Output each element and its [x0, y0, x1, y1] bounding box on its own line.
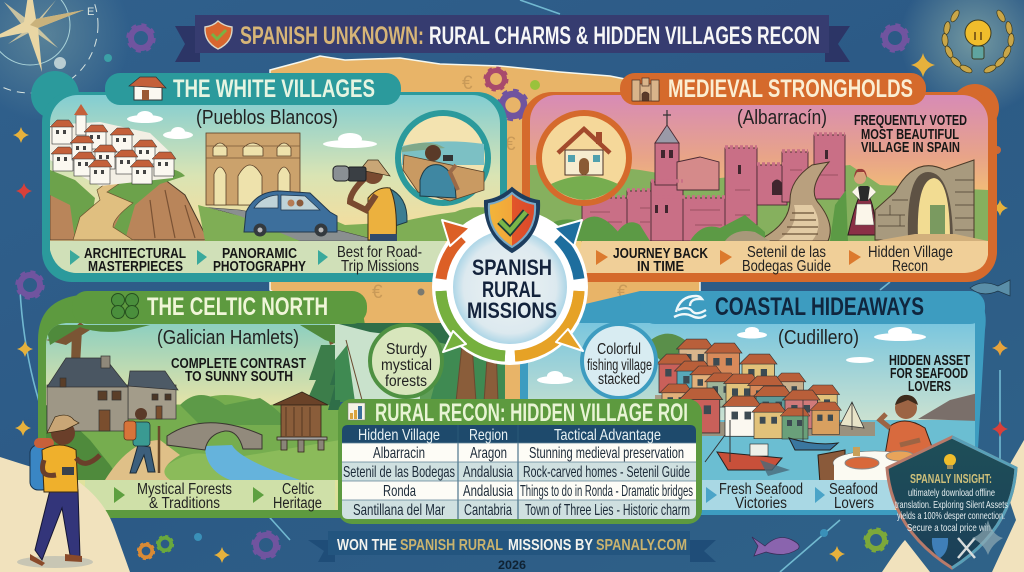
compass rose [0, 0, 98, 93]
callout circle: fishing village: stacked [598, 371, 640, 388]
table rows [343, 445, 693, 519]
clouds [537, 327, 926, 384]
caption strip: Recon [892, 258, 928, 275]
callout circle: fishing village: fishing village [587, 357, 652, 374]
sea [702, 420, 975, 480]
decorative euro signs: € [372, 282, 383, 303]
decorative euro signs: € [505, 134, 516, 155]
table heading: RURAL RECON: HIDDEN VILLAGE ROI [375, 399, 688, 427]
caption strip [50, 241, 445, 275]
caption strip: & Traditions [149, 495, 220, 512]
caption strip: Hidden Village [868, 244, 953, 261]
caption strip: Seafood [829, 481, 878, 498]
hiker [124, 408, 159, 473]
banner heading: SPANISH UNKNOWN: [240, 22, 424, 50]
panel subtitle: (Pueblos Blancos) [196, 107, 338, 129]
stone houses [47, 356, 178, 431]
panel subtitle: (Galician Hamlets) [157, 327, 299, 349]
caption strip: IN TIME [637, 259, 684, 275]
caption strip: Fresh Seafood [719, 481, 803, 498]
footer banner: WON THE [337, 537, 397, 554]
icon: wave [674, 296, 706, 318]
callout: LOVERS [908, 379, 951, 395]
caption strip: MASTERPIECES [88, 259, 183, 275]
icon: castle [632, 78, 659, 101]
footer banner [308, 531, 716, 562]
staircase [757, 162, 830, 241]
table rows: Town of Three Lies - Historic charm [525, 502, 690, 519]
table panel: rural recon [338, 399, 702, 524]
callout: COMPLETE CONTRAST [171, 356, 306, 372]
panel: medieval strongholds [522, 73, 999, 282]
caption strip: Celtic [282, 481, 314, 498]
harbour village [645, 334, 875, 439]
table header row: Region [469, 427, 508, 444]
table rows: Andalusia [463, 464, 513, 481]
caption strip: Setenil de las [747, 244, 826, 261]
heading text: COASTAL HIDEAWAYS [715, 293, 924, 321]
hills [80, 395, 338, 469]
village [50, 104, 176, 186]
caption strip: JOURNEY BACK [613, 246, 708, 262]
caption strip: Mystical Forests [137, 481, 232, 498]
table header row: Hidden Village [358, 427, 440, 444]
insight body: Secure a tocal price win. [907, 522, 993, 534]
path [105, 440, 180, 480]
callout: FREQUENTLY VOTED [854, 113, 967, 129]
icon: light bulb with laurel [941, 9, 1015, 74]
table rows: Ronda [383, 483, 416, 500]
panel: the celtic north [38, 291, 505, 518]
inset: house circle [539, 113, 629, 203]
diner with seafood table [818, 395, 935, 484]
centre hub: spanish rural missions [432, 188, 588, 365]
forest [330, 323, 505, 402]
table rows: Stunning medieval preservation [529, 445, 684, 462]
footer banner: SPANISH RURAL [400, 537, 503, 554]
photographer [333, 160, 407, 242]
decorative euro signs [372, 73, 628, 303]
callout: TO SUNNY SOUTH [185, 369, 293, 385]
callout circle: fishing village [582, 324, 656, 398]
horreo granary [273, 392, 328, 452]
map of Spain [270, 56, 700, 400]
table rows: Setenil de las Bodegas [343, 464, 455, 481]
panel: the white villages [31, 71, 507, 282]
woman [848, 169, 876, 235]
table rows: Rock-carved homes - Setenil Guide [523, 464, 690, 481]
heading text: THE CELTIC NORTH [147, 293, 328, 321]
heading text: THE WHITE VILLAGES [173, 75, 375, 103]
callout circle: forests: Sturdy [386, 341, 427, 358]
table rows: Cantabria [464, 502, 512, 519]
green slopes right [338, 207, 485, 241]
hub label: RURAL [482, 277, 541, 302]
stone arch [875, 160, 988, 241]
heading pill [620, 73, 926, 105]
arrow ring [441, 238, 579, 356]
table rows: Andalusia [463, 483, 513, 500]
icon: banner shield [205, 21, 232, 49]
bushes [532, 215, 765, 241]
car [244, 191, 337, 236]
callout: HIDDEN ASSET [889, 353, 970, 369]
callout circle: forests [370, 325, 442, 397]
table rows: Santillana del Mar [353, 502, 445, 519]
caption strip: Trip Missions [341, 258, 419, 275]
icon: white house [129, 77, 166, 100]
hills [530, 165, 988, 241]
heading text: MEDIEVAL STRONGHOLDS [668, 75, 913, 103]
traveller on sand [0, 415, 130, 572]
icon: shield [485, 188, 539, 252]
callout: FOR SEAFOOD [890, 366, 968, 382]
insight body [895, 487, 1008, 534]
icon: shield and swords [932, 538, 975, 558]
road [200, 207, 380, 241]
caption strip: ARCHITECTURAL [84, 246, 186, 262]
callout circle: fishing village: Colorful [597, 341, 641, 358]
table rows: Albarracin [373, 445, 425, 462]
table rows: Aragon [470, 445, 507, 462]
hub label: MISSIONS [467, 298, 557, 323]
caption strip [695, 480, 895, 512]
callout [171, 356, 306, 385]
table header row [358, 427, 661, 444]
callout: VILLAGE IN SPAIN [861, 140, 960, 156]
footer banner: MISSIONS BY [508, 537, 594, 554]
banner heading: RURAL CHARMS & HIDDEN VILLAGES RECON [429, 22, 820, 50]
heading pill [640, 291, 985, 324]
castle walls [582, 125, 845, 241]
trees [46, 323, 334, 358]
icon: bar chart [348, 403, 365, 420]
callout: MOST BEAUTIFUL [861, 127, 959, 143]
clouds [127, 111, 377, 148]
inset: viewpoint circle [398, 113, 488, 203]
caption strip: Lovers [834, 495, 874, 512]
river [205, 445, 300, 480]
panel subtitle: (Albarracín) [737, 107, 827, 129]
stone bridge [167, 423, 262, 450]
boats [705, 400, 864, 476]
caption strip: Heritage [273, 495, 322, 512]
hub label [467, 255, 557, 323]
caption strip: Victories [735, 495, 787, 512]
heading pill [72, 291, 367, 324]
table header row: Tactical Advantage [554, 427, 661, 444]
caption strip: PANORAMIC [222, 246, 297, 262]
decorative euro signs: € [462, 73, 473, 94]
decorative euro signs: € [617, 282, 628, 303]
icon: mini bulb [944, 454, 956, 469]
callout circle: forests: mystical [381, 357, 432, 374]
panel subtitle: (Cudillero) [778, 327, 859, 349]
panel: coastal hideaways [520, 291, 986, 515]
icon: clover [112, 294, 138, 318]
icon: fish [752, 280, 1010, 556]
caption strip [85, 480, 335, 512]
callout [889, 353, 970, 395]
title banner [175, 15, 850, 62]
compass rose: E [87, 6, 94, 18]
callout [854, 113, 967, 156]
caption strip: PHOTOGRAPHY [213, 259, 306, 275]
caption strip: Bodegas Guide [742, 258, 831, 275]
callout circle: forests: forests [385, 373, 427, 390]
spanaly insight shield [887, 437, 1016, 568]
table [342, 425, 696, 519]
footer banner: SPANALY.COM [596, 537, 687, 554]
caption strip [575, 241, 988, 275]
cliffs and path [50, 195, 90, 240]
caption strip: Best for Road- [337, 244, 422, 261]
aqueduct [206, 133, 300, 205]
heading pill [105, 73, 401, 105]
year: 2026 [498, 558, 526, 572]
hub label: SPANISH [472, 255, 552, 280]
table rows: Things to do in Ronda - Dramatic bridges [520, 483, 693, 500]
